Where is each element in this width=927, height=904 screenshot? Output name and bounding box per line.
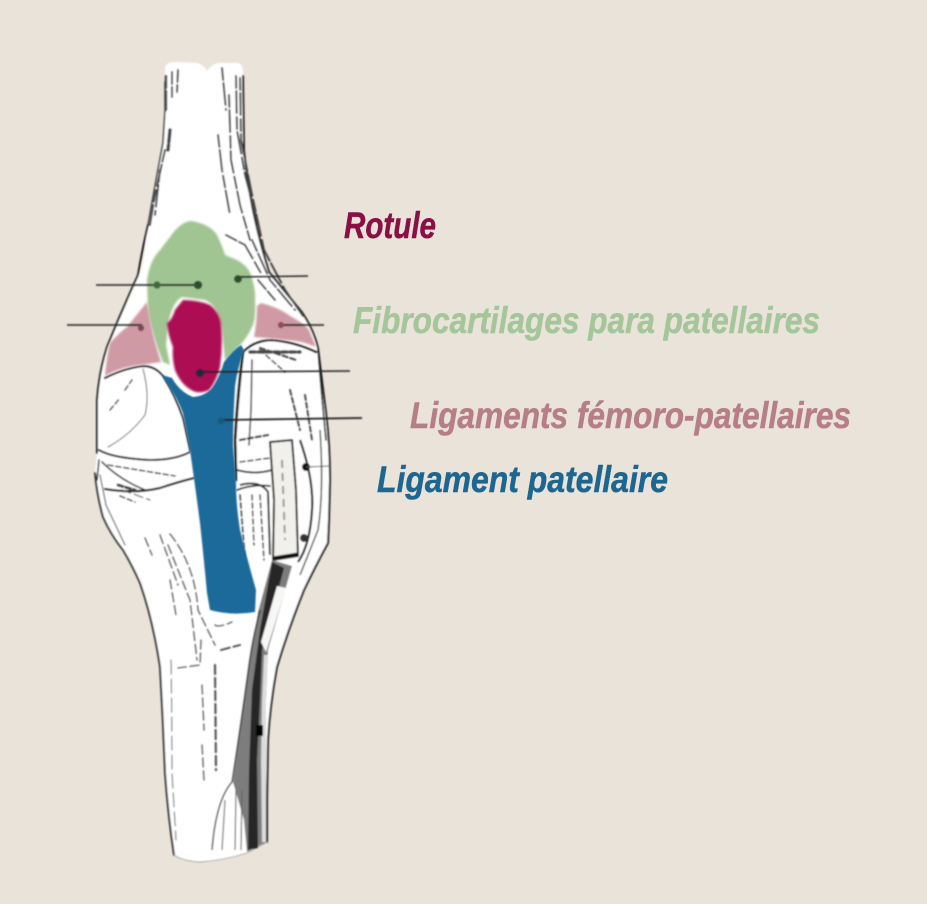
label: Ligament patellaire: Ligament patellaire <box>377 459 668 500</box>
region: ligaments fémoro-patellaires right <box>254 303 316 347</box>
femur shading <box>150 68 303 316</box>
bone silhouette <box>95 62 330 862</box>
fibula dark strip <box>212 560 292 852</box>
region: rotule <box>167 300 222 392</box>
region: fibrocartilages para patellaires <box>147 221 255 365</box>
bone outer outline <box>95 76 330 862</box>
tibia shading <box>122 490 240 780</box>
label: Ligaments fémoro-patellaires: Ligaments fémoro-patellaires <box>410 395 851 436</box>
label: Fibrocartilages para patellaires: Fibrocartilages para patellaires <box>353 300 820 341</box>
condyle shading <box>108 348 312 560</box>
region: ligament patellaire <box>162 345 256 614</box>
label: Rotule: Rotule <box>344 205 436 246</box>
knee anatomy illustration <box>95 62 330 862</box>
tendon stub <box>240 430 330 575</box>
condyle outlines <box>97 340 326 545</box>
leader lines and dots <box>67 275 362 424</box>
region: ligaments fémoro-patellaires left <box>105 302 161 376</box>
